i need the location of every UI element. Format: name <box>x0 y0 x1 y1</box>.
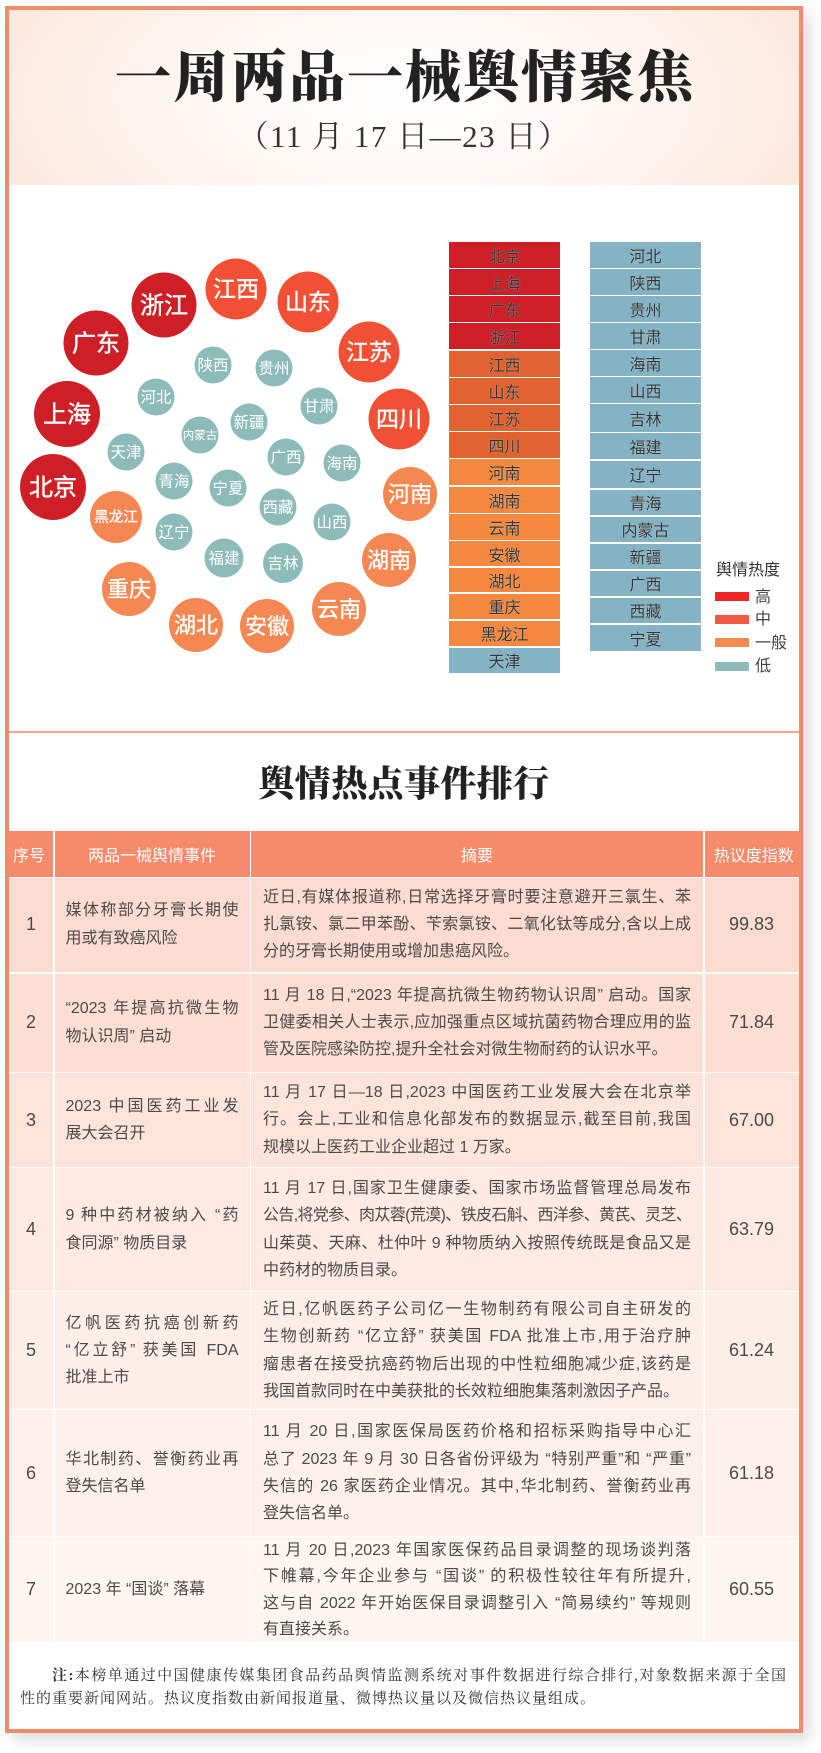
low heat bubbles: 山西 <box>316 514 348 532</box>
event row 4: 山茱萸、天麻、杜仲叶 9 种物质纳入按照传统既是食品又是 <box>263 1234 691 1252</box>
event row 2: 卫健委相关人士表示,应加强重点区域抗菌药物合理应用的监 <box>263 1014 691 1031</box>
low heat bubbles <box>108 346 360 583</box>
footnote <box>20 1667 786 1707</box>
event row 2: 2 <box>26 1012 36 1032</box>
event row 4 <box>9 1168 799 1291</box>
event row 6: 失信的 26 家医药企业情况。其中,华北制药、誉衡药业再 <box>263 1478 691 1495</box>
section heading: 舆情热点事件排行 <box>258 756 550 807</box>
title: 一周两品一械舆情聚焦 <box>115 34 695 114</box>
event row 5: 亿帆医药抗癌创新药 <box>66 1315 238 1332</box>
text: 河北 <box>629 249 662 266</box>
high heat bubbles: 北京 <box>29 474 77 502</box>
province ranking column 1 <box>449 242 560 673</box>
event row 1: 扎氯铵、氯二甲苯酚、苄索氯铵、二氧化钛等成分,含以上成 <box>263 916 691 933</box>
event row 3: 展大会召开 <box>66 1125 146 1142</box>
text: 辽宁 <box>629 468 662 485</box>
general heat bubbles: 安徽 <box>245 614 289 639</box>
event row 2: 11 月 18 日,“2023 年提高抗微生物药物认识周” 启动。国家 <box>263 987 691 1004</box>
event row 6: 61.18 <box>729 1462 774 1482</box>
low heat bubbles: 西藏 <box>262 498 294 516</box>
event row 4: 63.79 <box>729 1219 774 1239</box>
event row 5: 生物创新药 “亿立舒” 获美国 FDA 批准上市,用于治疗肿 <box>263 1328 691 1345</box>
event row 1: 分的牙膏长期使用或增加患癌风险。 <box>263 943 519 960</box>
text: 低 <box>755 658 771 675</box>
event row 6: 总了 2023 年 9 月 30 日各省份评级为 “特别严重”和 “严重” <box>263 1451 691 1468</box>
event row 5: 5 <box>26 1340 36 1360</box>
event row 5: 瘤患者在接受抗癌药物后出现的中性粒细胞减少症,该药是 <box>263 1356 691 1372</box>
text: 宁夏 <box>629 632 662 649</box>
general heat bubbles: 重庆 <box>107 577 151 602</box>
table header <box>9 831 799 877</box>
event row 1: 媒体称部分牙膏长期使 <box>66 902 238 919</box>
event row 7: 11 月 20 日,2023 年国家医保药品目录调整的现场谈判落 <box>263 1542 691 1559</box>
text: 黑龙江 <box>480 627 528 644</box>
header band <box>9 10 799 185</box>
event row 5: 我国首款同时在中美获批的长效粒细胞集落刺激因子产品。 <box>263 1383 679 1400</box>
legend: heat levels <box>715 561 787 675</box>
event row 5: 近日,亿帆医药子公司亿一生物制药有限公司自主研发的 <box>263 1301 691 1318</box>
text: 上海 <box>488 276 520 293</box>
event row 5: “亿立舒” 获美国 FDA <box>66 1342 238 1359</box>
event row 3: 行。会上,工业和信息化部发布的数据显示,截至目前,我国 <box>263 1111 691 1128</box>
date subtitle: （11 月 17 日—23 日） <box>238 119 570 154</box>
text: 天津 <box>488 654 520 671</box>
event row 4: 公告,将党参、肉苁蓉(荒漠)、铁皮石斛、西洋参、黄芪、灵芝、 <box>263 1207 691 1224</box>
event row 4: 9 种中药材被纳入 “药 <box>66 1207 238 1224</box>
event row 6 <box>9 1410 799 1536</box>
high heat bubbles <box>20 272 196 520</box>
text: 重庆 <box>488 600 520 617</box>
general heat bubbles <box>90 467 437 653</box>
text: 四川 <box>488 439 520 456</box>
event row 3: 规模以上医药工业企业超过 1 万家。 <box>263 1139 521 1156</box>
text: 两品一械舆情事件 <box>88 848 216 865</box>
text: 摘要 <box>461 848 493 865</box>
high heat bubbles: 浙江 <box>140 292 188 320</box>
event row 2 <box>9 974 799 1072</box>
low heat bubbles: 广西 <box>270 448 302 466</box>
event row 6: 6 <box>26 1462 36 1482</box>
event row 6: 登失信名单。 <box>263 1505 359 1522</box>
event row 1 <box>9 878 799 972</box>
event row 7: 60.55 <box>729 1579 774 1599</box>
event row 4: 11 月 17 日,国家卫生健康委、国家市场监督管理总局发布 <box>263 1180 691 1197</box>
text: 海南 <box>629 357 662 374</box>
text: 热议度指数 <box>714 848 794 865</box>
medium heat bubbles: 江苏 <box>346 339 392 365</box>
general heat bubbles: 湖北 <box>174 613 218 638</box>
footnote: 注:本榜单通过中国健康传媒集团食品药品舆情监测系统对事件数据进行综合排行,对象数据来源于全国 <box>52 1668 786 1684</box>
province ranking column 2 <box>590 242 701 651</box>
text: 河南 <box>488 466 520 483</box>
footnote: 性的重要新闻网站。热议度指数由新闻报道量、微博热议量以及微信热议量组成。 <box>20 1691 596 1707</box>
text: 高 <box>755 589 771 606</box>
event row 3: 11 月 17 日—18 日,2023 中国医药工业发展大会在北京举 <box>263 1084 691 1101</box>
general heat bubbles: 湖南 <box>367 548 411 573</box>
event row 3: 3 <box>26 1110 36 1130</box>
text: 贵州 <box>629 303 662 320</box>
event row 5: 61.24 <box>729 1340 774 1360</box>
text: 陕西 <box>629 276 662 293</box>
low heat bubbles: 陕西 <box>197 356 229 374</box>
low heat bubbles: 天津 <box>110 444 142 462</box>
text: 江苏 <box>488 412 520 429</box>
text: 一般 <box>755 635 787 652</box>
text: 湖北 <box>488 574 520 591</box>
text: 湖南 <box>488 494 520 511</box>
event row 3: 2023 中国医药工业发 <box>66 1098 238 1115</box>
low heat bubbles: 内蒙古 <box>183 428 217 442</box>
low heat bubbles: 吉林 <box>267 554 299 572</box>
event row 1: 1 <box>26 914 36 934</box>
text: 内蒙古 <box>621 523 670 540</box>
event row 4: 4 <box>26 1219 36 1239</box>
bubble chart: provinces by heat <box>20 258 437 653</box>
medium heat bubbles: 江西 <box>213 276 259 302</box>
event row 6: 登失信名单 <box>66 1478 146 1495</box>
event row 5 <box>9 1292 799 1409</box>
event row 1: 99.83 <box>729 914 774 934</box>
event row 4: 中药材的物质目录。 <box>263 1262 407 1279</box>
text: 福建 <box>629 440 662 457</box>
general heat bubbles: 云南 <box>317 597 361 622</box>
event row 7: 下帷幕,今年企业参与 “国谈” 的积极性较往年有所提升, <box>263 1568 691 1585</box>
text: 安徽 <box>488 548 520 565</box>
event row 7: 2023 年 “国谈” 落幕 <box>66 1581 205 1598</box>
text: 甘肃 <box>629 330 662 347</box>
high heat bubbles: 广东 <box>72 330 120 358</box>
text: 序号 <box>13 848 45 865</box>
text: 新疆 <box>629 550 662 567</box>
low heat bubbles: 甘肃 <box>303 398 335 416</box>
low heat bubbles: 宁夏 <box>212 480 244 498</box>
event row 6: 11 月 20 日,国家医保局医药价格和招标采购指导中心汇 <box>263 1423 691 1440</box>
event row 1: 用或有致癌风险 <box>66 930 178 947</box>
text: 云南 <box>488 521 520 538</box>
event row 6: 华北制药、誉衡药业再 <box>66 1451 238 1468</box>
low heat bubbles: 河北 <box>140 388 172 406</box>
general heat bubbles: 黑龙江 <box>94 509 138 526</box>
event row 7: 7 <box>26 1579 36 1599</box>
text: 山西 <box>629 384 662 401</box>
text: 山东 <box>488 385 520 402</box>
text: 江西 <box>488 358 520 375</box>
text: 舆情热度 <box>716 562 780 579</box>
general heat bubbles: 河南 <box>388 482 432 507</box>
text: 广西 <box>629 577 662 594</box>
medium heat bubbles: 山东 <box>285 289 331 315</box>
event row 5: 批准上市 <box>66 1369 130 1386</box>
event row 7 <box>9 1537 799 1642</box>
text: 广东 <box>488 303 520 320</box>
text: 浙江 <box>488 330 520 347</box>
low heat bubbles: 辽宁 <box>158 524 190 542</box>
high heat bubbles: 上海 <box>43 402 91 428</box>
text: 西藏 <box>629 604 662 621</box>
text: 吉林 <box>629 412 662 429</box>
low heat bubbles: 海南 <box>326 454 358 472</box>
event row 7: 有直接关系。 <box>263 1621 359 1638</box>
text: 中 <box>755 611 771 628</box>
low heat bubbles: 青海 <box>158 472 190 490</box>
event row 2: 管及医院感染防控,提升全社会对微生物耐药的认识水平。 <box>263 1041 667 1058</box>
medium heat bubbles <box>206 258 430 450</box>
low heat bubbles: 贵州 <box>258 360 290 378</box>
low heat bubbles: 福建 <box>208 550 240 568</box>
event row 4: 食同源” 物质目录 <box>66 1234 187 1252</box>
event row 3: 67.00 <box>729 1110 774 1130</box>
text: 北京 <box>488 249 520 266</box>
medium heat bubbles: 四川 <box>376 406 422 432</box>
event row 1: 近日,有媒体报道称,日常选择牙膏时要注意避开三氯生、苯 <box>263 889 691 906</box>
event row 2: 物认识周” 启动 <box>66 1028 171 1045</box>
event row 2: 71.84 <box>729 1012 774 1032</box>
text: 青海 <box>629 496 662 513</box>
low heat bubbles: 新疆 <box>233 414 265 432</box>
event row 7: 这与自 2022 年开始医保目录调整引入 “简易续约” 等规则 <box>263 1594 691 1612</box>
event row 3 <box>9 1073 799 1167</box>
